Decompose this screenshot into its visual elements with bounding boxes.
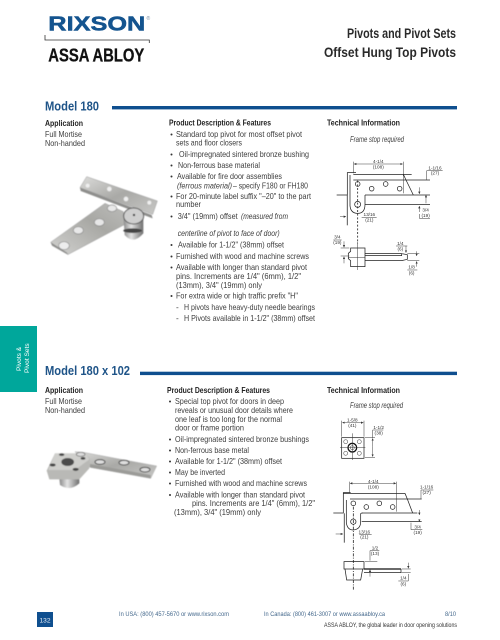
elevation view of pivot: (19) [414, 530, 422, 535]
product description and features list: For extra wide or high traffic prefix "H" [176, 290, 298, 300]
product description and features list [169, 118, 316, 323]
side tab: Pivots & Pivot Sets [0, 326, 37, 392]
side tab: Pivots & Pivot Sets: Pivot Sets [24, 343, 31, 373]
product description and features list: (measured from [241, 211, 288, 221]
technical drawing: Model 180: (108) [373, 164, 384, 169]
product description and features list [167, 385, 315, 517]
product description and features list: pins. Increments are 1/4" (6mm), 1/2" [192, 498, 315, 508]
technical drawing: Model 180: 3/4 [334, 234, 341, 239]
product description and features list: Available for 1-1/2" (38mm) offset [178, 240, 285, 250]
section view of pivot [344, 546, 411, 586]
title [324, 26, 456, 60]
product photo: 180 x 102 pivot [47, 452, 157, 488]
plan view of square plate: 1-5/8 [347, 418, 358, 423]
technical drawing: Model 180: 1/4 [397, 241, 404, 246]
product description and features list: number [176, 199, 201, 209]
application text: Application [45, 118, 83, 128]
section view of pivot: (13) [371, 551, 380, 556]
elevation view of pivot: 4-1/4 [368, 479, 379, 484]
technical drawing: Model 180: 4-1/4 [373, 159, 384, 164]
technical drawing: Model 180: (27) [431, 171, 440, 176]
product description and features list: sets and floor closers [176, 138, 242, 148]
logo: Rixson / Assa Abloy [45, 14, 150, 66]
product description and features list: door or frame portion [175, 422, 244, 432]
product description and features list: Product Description & Features [167, 385, 270, 395]
product description and features list: Available with longer than standard pivot [175, 490, 306, 500]
product description and features list: Oil-impregnated sintered bronze bushing [179, 149, 309, 159]
product description and features list: Available with longer than standard pivot [176, 262, 308, 272]
technical drawing: Model 180: (21) [365, 218, 374, 223]
section view of pivot: 1/4 [400, 576, 407, 581]
elevation view of pivot: (21) [360, 534, 369, 539]
title: Offset Hung Top Pivots [324, 45, 456, 60]
product description and features list: Special top pivot for doors in deep [175, 396, 284, 406]
application text: Non-handed [45, 138, 85, 148]
page number box: 132 [39, 618, 51, 624]
product description and features list: - [176, 302, 179, 312]
footer contact and date: ASSA ABLOY, the global leader in door opening solutions [324, 622, 457, 629]
elevation view of pivot: (27) [423, 490, 431, 495]
product description and features list: Standard top pivot for most offset pivot [176, 129, 303, 139]
plan view of square plate [340, 418, 384, 460]
footer contact and date: 8/10 [445, 611, 456, 618]
technical drawing: Model 180: (6) [409, 270, 415, 275]
technical drawing: Model 180: (6) [397, 247, 404, 252]
technical drawing: Model 180: 3/4 [422, 207, 429, 212]
technical drawing: Model 180: 1/8 [408, 265, 415, 270]
title: Pivots and Pivot Sets [347, 26, 456, 41]
product description and features list: Furnished with wood and machine screws [175, 478, 307, 488]
elevation view of pivot: 1-1/16 [420, 485, 434, 490]
application text [45, 118, 85, 148]
page number box [37, 612, 53, 627]
application text: Application [45, 385, 83, 395]
product description and features list: Available for fire door assemblies [177, 171, 282, 181]
technical drawing: Model 180: 13/16 [364, 212, 376, 217]
footer contact and date: In USA: (800) 457-5670 or www.rixson.com [119, 611, 229, 618]
section rule [112, 106, 457, 109]
product description and features list: one leaf is too long for the normal [175, 414, 282, 424]
technical drawing: Model 180 x 102 [333, 418, 434, 590]
note: frame stop required: Frame stop required [350, 400, 403, 410]
logo: Rixson / Assa Abloy: RIXSON [48, 14, 145, 36]
technical drawing: Model 180: (19) [422, 213, 430, 218]
product description and features list: pins. Increments are 1/4" (6mm), 1/2" [176, 271, 301, 281]
product description and features list: - [176, 313, 179, 323]
product description and features list: Non-ferrous base material [178, 160, 260, 170]
section: Model 180 x 102 [45, 364, 457, 590]
product description and features list: 3/4" (19mm) offset [178, 211, 238, 221]
section view of pivot: (6) [400, 581, 407, 586]
elevation view of pivot: 13/16 [359, 529, 371, 534]
footer contact and date [119, 611, 457, 629]
section: Model 180 [45, 100, 457, 323]
heading: Model 180 x 102: Model 180 x 102 [45, 364, 130, 378]
footer contact and date: In Canada: (800) 461-3007 or www.assaabloy.ca [264, 611, 385, 618]
elevation view of pivot: 3/4 [414, 524, 421, 529]
technical information heading: Technical Information [327, 385, 400, 395]
product description and features list: Product Description & Features [169, 118, 271, 128]
product description and features list: May be inverted [175, 467, 225, 477]
product description and features list: For 20-minute label suffix "–20" to the part [176, 191, 312, 201]
product description and features list: H Pivots available in 1-1/2" (38mm) offset [184, 313, 316, 323]
product photo: top pivot [51, 177, 157, 255]
logo: Rixson / Assa Abloy: ASSA ABLOY [48, 45, 145, 66]
product description and features list: Non-ferrous base metal [175, 445, 249, 455]
product description and features list: – specify F180 or FH180 [233, 180, 308, 190]
application text: Non-handed [45, 405, 85, 415]
technical drawing: Model 180: 1-1/16 [428, 165, 442, 170]
application text [45, 385, 85, 415]
product description and features list: centerline of pivot to face of door) [178, 228, 280, 238]
application text: Full Mortise [45, 129, 82, 139]
logo: Rixson / Assa Abloy: ® [146, 15, 150, 22]
product description and features list: Available for 1-1/2" (38mm) offset [175, 456, 283, 466]
product description and features list: (13mm), 3/4" (19mm) only [176, 280, 263, 290]
product description and features list: Oil-impregnated sintered bronze bushings [175, 434, 309, 444]
application text: Full Mortise [45, 396, 82, 406]
product description and features list: (ferrous material) [177, 180, 232, 190]
technical drawing: Model 180 [333, 159, 443, 275]
technical drawing: Model 180: (19) [333, 240, 342, 245]
product description and features list: Furnished with wood and machine screws [176, 251, 309, 261]
note: frame stop required: Frame stop required [350, 134, 404, 144]
plan view of square plate: (38) [375, 430, 383, 435]
product description and features list: (13mm), 3/4" (19mm) only [174, 507, 262, 517]
technical information heading: Technical Information [327, 118, 400, 128]
elevation view of pivot: (108) [368, 484, 379, 489]
section view of pivot: 1/2 [372, 546, 379, 551]
plan view of square plate: 1-1/2 [373, 425, 384, 430]
product description and features list: H pivots have heavy-duty needle bearings [184, 302, 315, 312]
side tab: Pivots & Pivot Sets: Pivots & [16, 346, 23, 371]
section rule [140, 372, 457, 375]
plan view of square plate: (41) [348, 423, 357, 428]
heading: Model 180: Model 180 [45, 100, 99, 114]
elevation view of pivot [333, 479, 434, 590]
product description and features list: reveals or unusual door details where [175, 405, 293, 415]
